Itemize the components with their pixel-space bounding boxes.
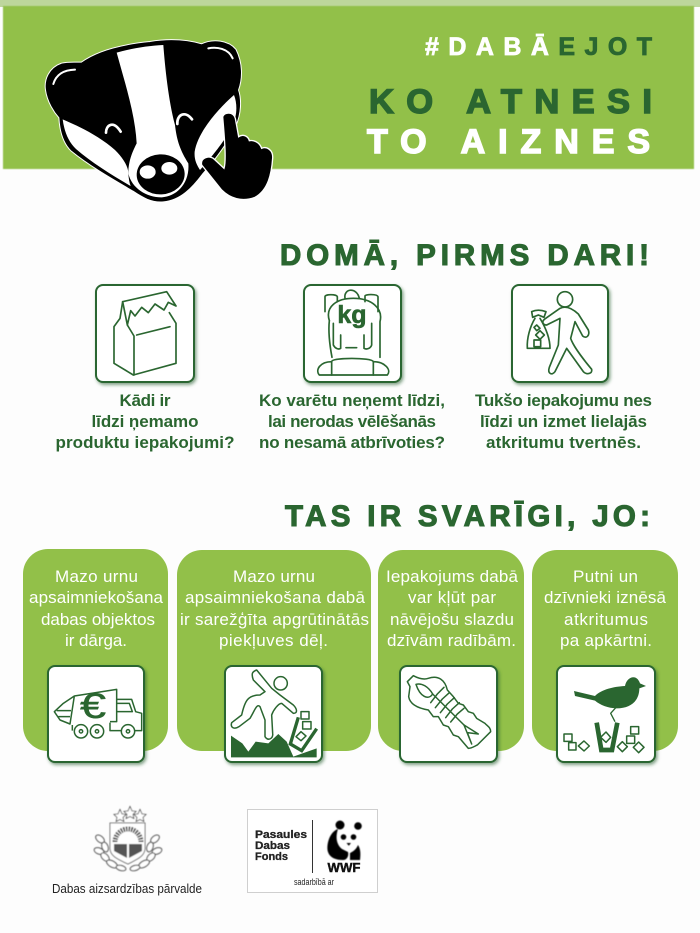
title line 2: TO AIZNES bbox=[367, 123, 650, 161]
icon: person with bag bbox=[512, 285, 608, 382]
icon: person falling bbox=[225, 666, 322, 762]
card text: ir sarežģīta apgrūtinātās bbox=[180, 610, 369, 629]
panel: carry packaging bbox=[475, 285, 652, 452]
caption bbox=[259, 391, 445, 452]
logo text bbox=[255, 829, 307, 863]
card text bbox=[544, 567, 667, 650]
caption: līdzi ņemamo bbox=[92, 412, 198, 431]
card text: piekļuves dēļ. bbox=[219, 631, 328, 650]
title line 1: KO ATNESI bbox=[369, 83, 652, 121]
hashtag: #DABĀ EJOT bbox=[425, 33, 652, 61]
card text bbox=[386, 567, 519, 650]
icon: garbage truck with euro bbox=[48, 666, 144, 762]
card text: dzīvām radībām. bbox=[387, 631, 516, 650]
logo text: Dabas bbox=[255, 840, 290, 852]
icon: fish skeleton in bottle bbox=[400, 666, 497, 762]
panel: card birds and animals bbox=[532, 550, 678, 762]
card text bbox=[29, 567, 164, 650]
logo: WWF partnership box bbox=[248, 810, 378, 892]
icon: garbage truck with euro: € bbox=[80, 687, 106, 726]
card text: Mazo urnu bbox=[233, 567, 315, 586]
logo: Dabas aizsardzības pārvalde bbox=[52, 806, 202, 896]
card text: var kļūt par bbox=[408, 588, 496, 607]
logo text: Pasaules bbox=[255, 829, 307, 841]
card text: apsaimniekošana dabā bbox=[185, 588, 366, 607]
caption bbox=[475, 391, 652, 452]
caption: Tukšo iepakojumu nes bbox=[475, 391, 652, 410]
icon: bird on bin bbox=[557, 666, 655, 762]
card text: nāvējošu slazdu bbox=[390, 610, 514, 629]
card text: dabas objektos bbox=[41, 610, 155, 629]
coat of arms bbox=[93, 806, 163, 872]
caption: no nesamā atbrīvoties? bbox=[259, 433, 445, 452]
header band bbox=[3, 6, 694, 169]
card text: Putni un bbox=[573, 567, 638, 586]
logo text: Fonds bbox=[255, 851, 288, 863]
card text: apsaimniekošana bbox=[29, 588, 164, 607]
logo: WWF partnership box: WWF bbox=[328, 861, 361, 875]
icon: paper bag bbox=[96, 285, 194, 382]
heading: think before acting: DOMĀ, PIRMS DARI! bbox=[280, 239, 649, 272]
caption: Kādi ir bbox=[120, 391, 171, 410]
panel: card difficult access bbox=[177, 550, 371, 762]
card text: Mazo urnu bbox=[55, 567, 138, 586]
caption: līdzi un izmet lielajās bbox=[480, 412, 647, 431]
caption bbox=[56, 391, 234, 452]
panel: card deadly trap bbox=[378, 550, 524, 762]
icon: backpack with kg bbox=[304, 285, 401, 382]
oak leaves bbox=[93, 833, 163, 872]
card text: ir dārga. bbox=[65, 631, 127, 650]
caption: produktu iepakojumi? bbox=[56, 433, 234, 452]
panel: card cost bbox=[23, 549, 168, 762]
card text: Iepakojums dabā bbox=[386, 567, 519, 586]
logo: WWF partnership box: sadarbībā ar bbox=[294, 877, 334, 887]
panel: what not to take bbox=[259, 285, 445, 452]
icon: backpack with kg: kg bbox=[337, 301, 367, 329]
panel: packaging question bbox=[56, 285, 234, 452]
heading: why it matters: TAS IR SVARĪGI, JO: bbox=[285, 500, 650, 533]
caption: atkritumu tvertnēs. bbox=[486, 433, 641, 452]
caption: lai nerodas vēlēšanās bbox=[268, 412, 436, 431]
icon: panda bbox=[327, 820, 362, 860]
card text: atkritumus bbox=[564, 610, 648, 629]
card text: pa apkārtni. bbox=[560, 631, 652, 650]
icon: badger mascot bbox=[46, 41, 273, 201]
card text bbox=[180, 567, 369, 650]
logo: Dabas aizsardzības pārvalde: Dabas aizsardzības pārvalde bbox=[52, 882, 202, 896]
card text: dzīvnieki iznēsā bbox=[544, 588, 667, 607]
caption: Ko varētu neņemt līdzi, bbox=[259, 391, 445, 410]
